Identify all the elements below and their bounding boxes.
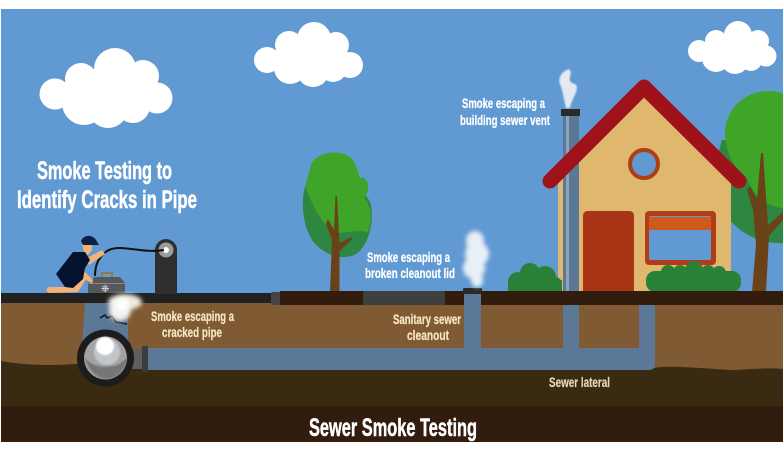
- foot and lower leg: [46, 273, 88, 293]
- cloud: right: [688, 21, 776, 74]
- label: sewer lateral: Sewer lateral: [549, 374, 610, 390]
- toolbox: [88, 273, 125, 295]
- label: sanitary sewer cleanout: [393, 311, 461, 343]
- soil: lower dark: [1, 361, 783, 407]
- arm lower: [79, 268, 93, 284]
- sky background: [1, 9, 783, 299]
- vent pipe in front of wall: [563, 160, 579, 291]
- smoke: building vent: [559, 69, 577, 108]
- cloud: left: [40, 48, 172, 128]
- label: building sewer vent: building sewer vent: [460, 112, 550, 128]
- door: [583, 211, 634, 291]
- manhole shaft: [82, 303, 128, 345]
- label: building sewer vent: Smoke escaping a: [462, 95, 545, 111]
- cap: [81, 236, 99, 245]
- worker: [46, 236, 105, 293]
- label: broken cleanout lid: [365, 249, 455, 281]
- label: cracked pipe: Smoke escaping a: [151, 308, 234, 324]
- toolbox: ❈: [101, 284, 109, 295]
- smoke: broken cleanout lid: [463, 231, 489, 287]
- house vent pipe: [561, 109, 580, 293]
- crack in pipe: [100, 315, 127, 324]
- soil: upper brown: [1, 300, 783, 370]
- hose: [95, 248, 164, 276]
- arm upper: [85, 250, 105, 265]
- cloud: center: [254, 22, 363, 87]
- label: broken cleanout lid: Smoke escaping a: [367, 249, 450, 265]
- house: [550, 87, 739, 291]
- bush: left: [508, 263, 562, 292]
- pipe collar: [142, 346, 148, 372]
- pipe stub: [130, 349, 143, 369]
- window: [645, 211, 716, 265]
- cleanout lid: [463, 288, 482, 294]
- torso: [56, 252, 90, 288]
- title: [17, 157, 197, 214]
- label: sanitary sewer cleanout: cleanout: [407, 327, 449, 343]
- label: cracked pipe: [151, 308, 234, 340]
- standpipe smoke machine: [155, 239, 177, 294]
- main pipe cross-section: [77, 330, 134, 386]
- label: sanitary sewer cleanout: Sanitary sewer: [393, 311, 461, 327]
- round window: [630, 150, 658, 178]
- tree: right: [716, 91, 783, 292]
- roof: [550, 87, 739, 181]
- title: Identify Cracks in Pipe: [17, 186, 197, 214]
- road surface: [1, 291, 783, 305]
- footer title: Sewer Smoke Testing: [309, 414, 477, 442]
- cleanout riser: [464, 294, 481, 349]
- label: building sewer vent: [460, 95, 550, 128]
- label: broken cleanout lid: broken cleanout lid: [365, 265, 455, 281]
- sewer lateral pipe: [145, 305, 655, 370]
- bottom band: [1, 406, 783, 442]
- head: [82, 244, 92, 255]
- bush: right: [646, 261, 741, 292]
- vent riser below ground: [563, 305, 579, 349]
- tree: middle: [303, 152, 372, 291]
- smoke: cracked pipe: [108, 294, 142, 321]
- title: Smoke Testing to: [37, 157, 172, 185]
- label: cracked pipe: cracked pipe: [162, 324, 222, 340]
